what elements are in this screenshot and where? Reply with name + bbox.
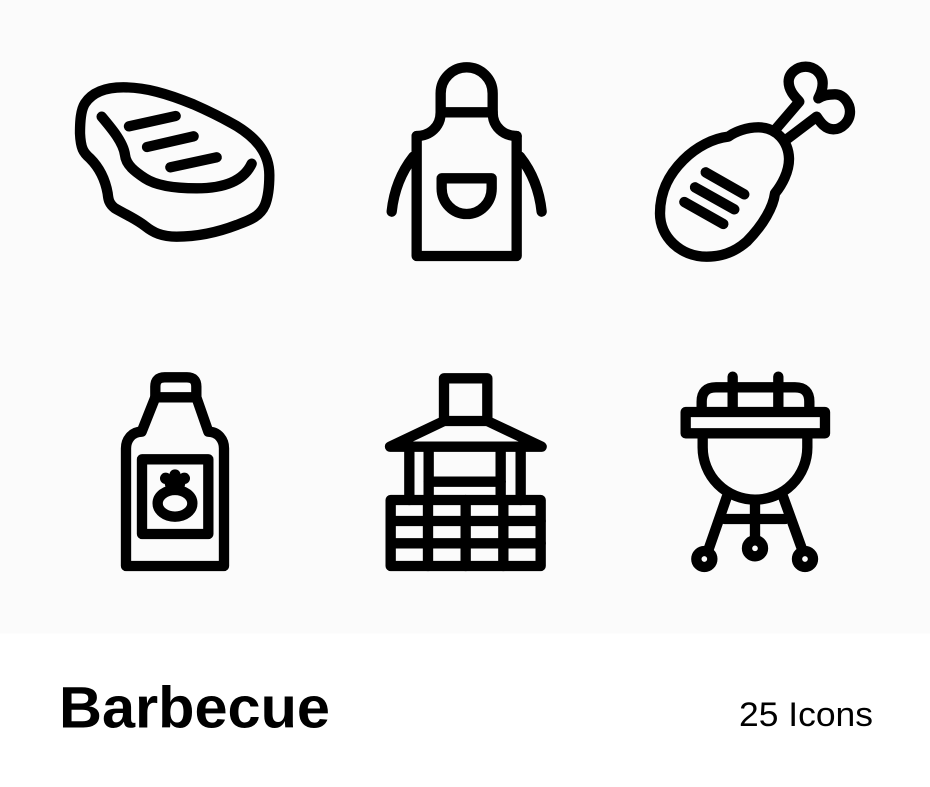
- icon: brick barbecue pit: [390, 378, 542, 566]
- icon: steak: [80, 87, 269, 237]
- icon: sauce bottle: [126, 377, 224, 566]
- title: Barbecue: [59, 676, 330, 740]
- icon: apron: [392, 67, 542, 256]
- icon: kettle grill: [686, 377, 825, 567]
- icon: chicken leg: [660, 67, 850, 257]
- icon count label: 25 Icons: [739, 696, 873, 734]
